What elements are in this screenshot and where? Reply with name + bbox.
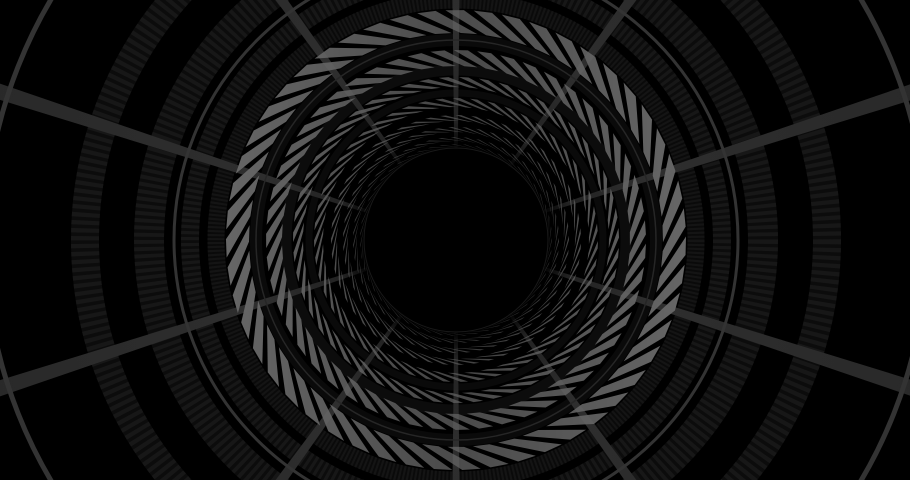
hatched rope rings xyxy=(226,10,686,470)
